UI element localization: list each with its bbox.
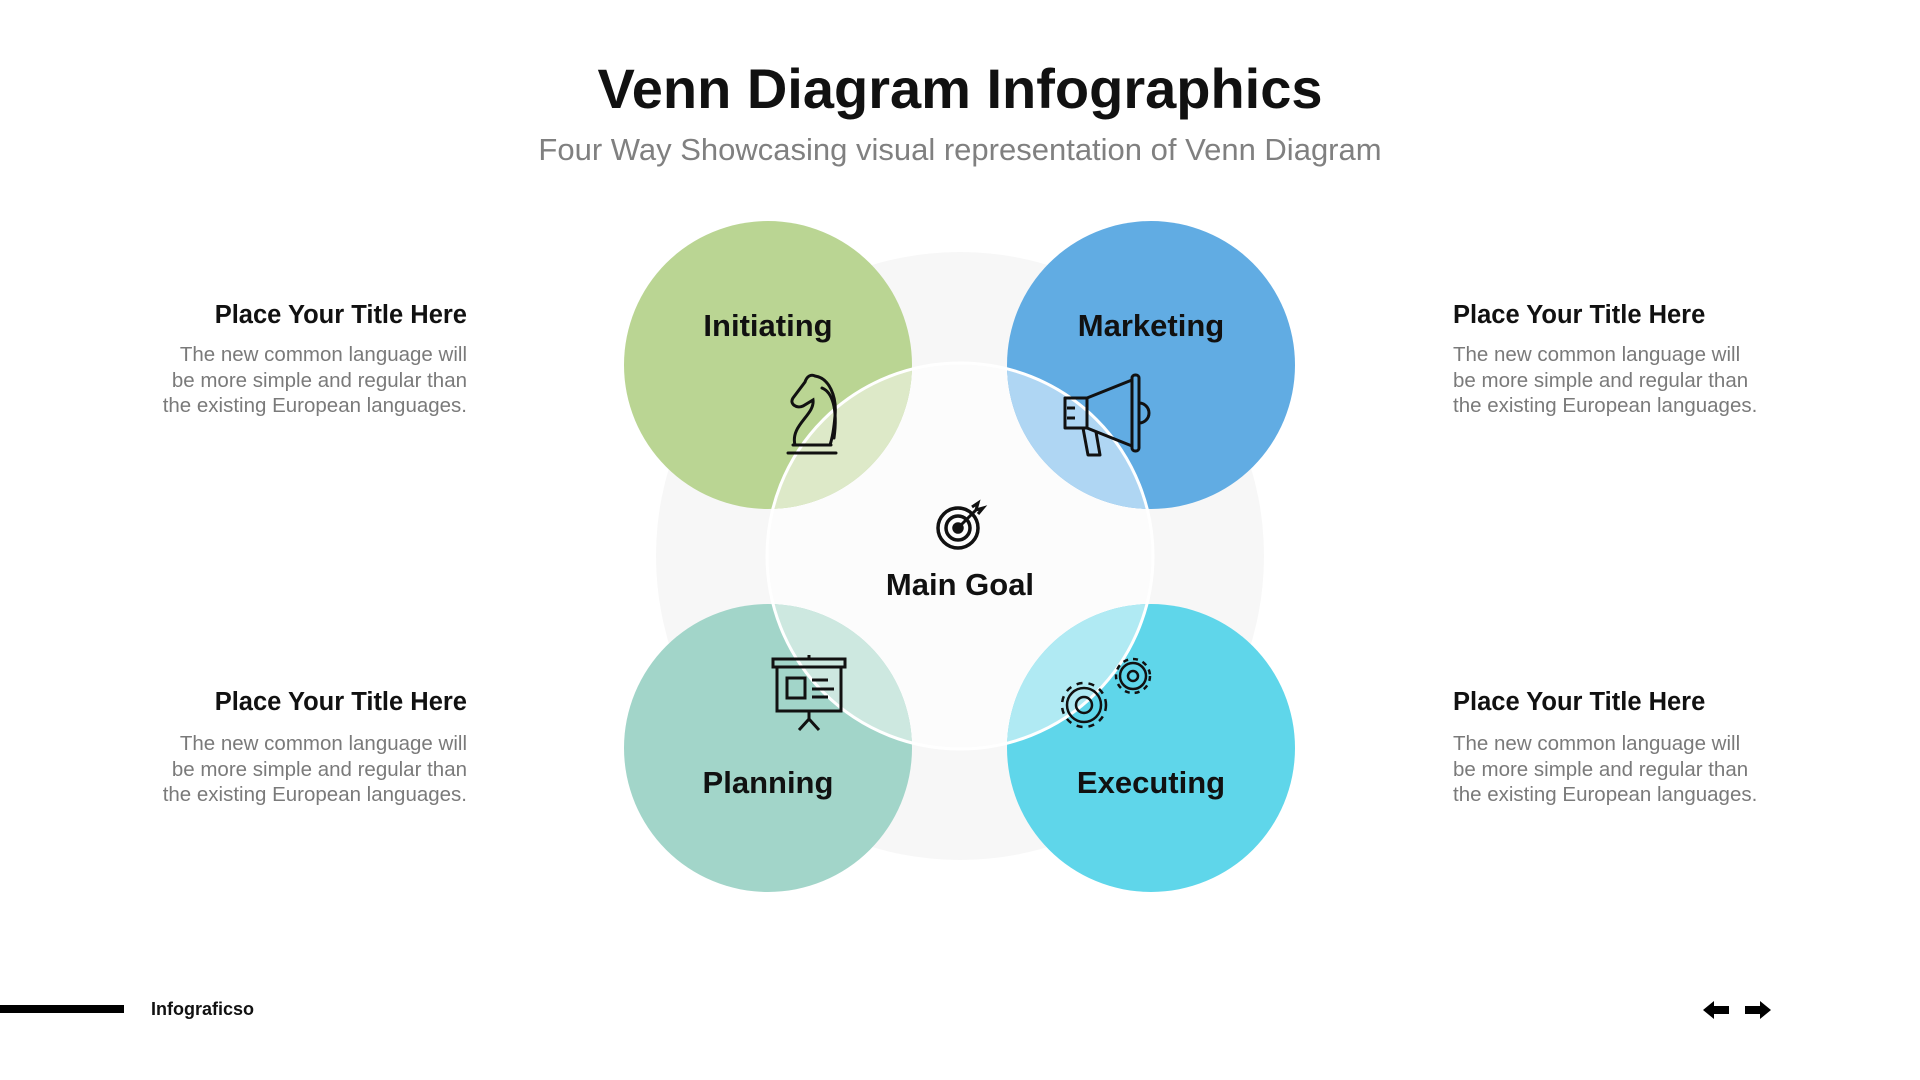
text block: bottom left: the existing European languages. bbox=[163, 783, 467, 806]
circle: Executing bbox=[1007, 604, 1295, 892]
text block: bottom right: the existing European languages. bbox=[1453, 783, 1757, 806]
venn diagram bbox=[624, 221, 1295, 892]
text block: bottom left: be more simple and regular than bbox=[172, 758, 467, 780]
text block: top left: The new common language will bbox=[180, 343, 467, 366]
circle: Planning bbox=[624, 604, 912, 892]
circle: Initiating bbox=[624, 221, 912, 509]
background circle bbox=[656, 252, 1264, 860]
subtitle: Four Way Showcasing visual representation of Venn Diagram bbox=[538, 132, 1382, 167]
icon: megaphone bbox=[1065, 375, 1149, 455]
text block: bottom right bbox=[1453, 688, 1757, 806]
footer brand: Infograficso bbox=[151, 999, 254, 1019]
text block: bottom right: be more simple and regular than bbox=[1453, 758, 1748, 780]
label: Initiating: Initiating bbox=[703, 308, 833, 343]
text block: top right: Place Your Title Here bbox=[1453, 301, 1705, 329]
text block: bottom left: The new common language will bbox=[180, 732, 467, 755]
text block: bottom right: Place Your Title Here bbox=[1453, 688, 1705, 716]
text block: top left bbox=[163, 301, 467, 417]
icon: chess knight bbox=[788, 375, 836, 453]
text block: top right: be more simple and regular than bbox=[1453, 368, 1748, 392]
text block: top left: Place Your Title Here bbox=[215, 301, 467, 329]
text block: bottom left: Place Your Title Here bbox=[215, 688, 467, 716]
text block: top left: be more simple and regular than bbox=[172, 368, 467, 392]
label: Marketing: Marketing bbox=[1078, 308, 1224, 343]
icon: presentation board bbox=[773, 655, 845, 730]
icon: gears bbox=[1062, 659, 1150, 727]
text block: top right bbox=[1453, 301, 1757, 417]
text block: top left: the existing European languages. bbox=[163, 394, 467, 417]
label: Planning: Planning bbox=[703, 765, 833, 800]
footer bar bbox=[0, 1005, 124, 1013]
center circle bbox=[767, 363, 1153, 749]
circle: Marketing bbox=[1007, 221, 1295, 509]
icon: target bbox=[938, 503, 983, 548]
label: Executing: Executing bbox=[1077, 765, 1225, 800]
text block: top right: the existing European languages. bbox=[1453, 394, 1757, 417]
text block: bottom left bbox=[163, 688, 467, 806]
text block: top right: The new common language will bbox=[1453, 343, 1740, 366]
title: Venn Diagram Infographics bbox=[597, 57, 1323, 120]
label: Main Goal: Main Goal bbox=[886, 567, 1034, 602]
nav arrows bbox=[1703, 1001, 1771, 1019]
text block: bottom right: The new common language will bbox=[1453, 732, 1740, 755]
